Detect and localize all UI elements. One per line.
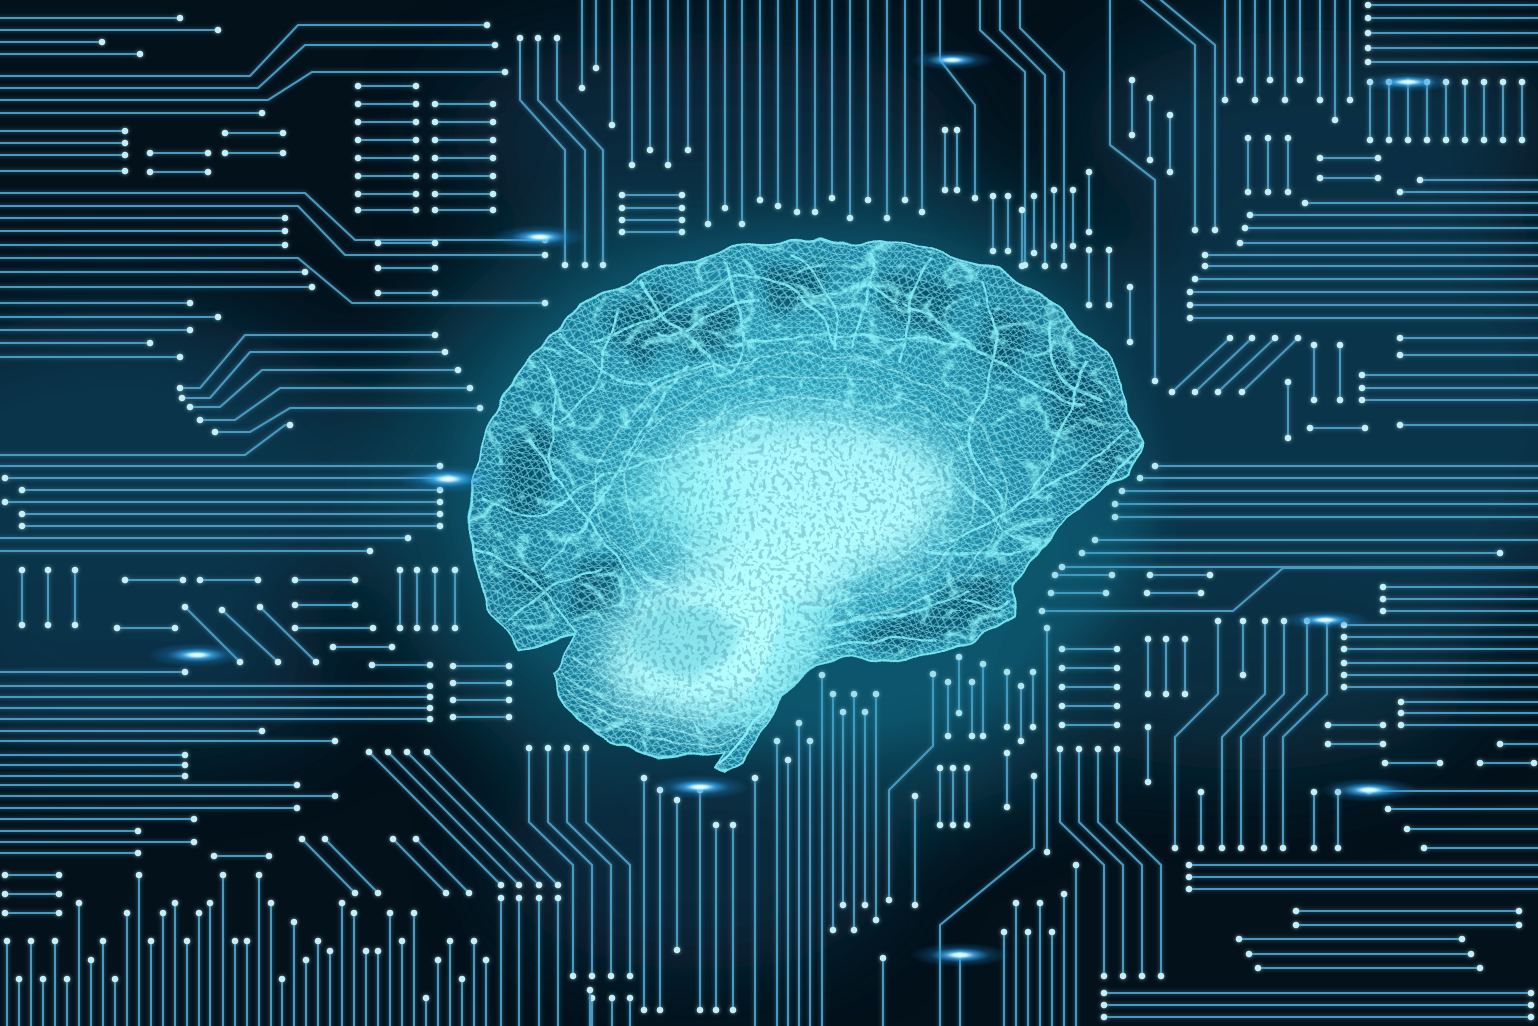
traces: lower right [1047, 587, 1538, 1017]
cerebellum dark centre [630, 604, 734, 676]
brain outline [471, 239, 1141, 776]
brain stem [720, 700, 770, 765]
brain body [460, 230, 1160, 790]
traces: bottom left verticals [7, 748, 630, 1026]
traces: bottom centre [590, 657, 1076, 1026]
dark cortex pockets [500, 262, 1125, 655]
traces: middle right [1042, 338, 1538, 611]
brain outer glow [460, 230, 1150, 750]
noise specks [460, 230, 1160, 790]
glowing light flares [147, 50, 1456, 967]
traces: top right [1110, 0, 1538, 381]
vein network [460, 230, 1160, 790]
limbic swirl rings [560, 355, 1005, 745]
brain shape with organic wobble [460, 230, 1160, 790]
bright core [610, 416, 955, 718]
traces: top centre [520, 0, 1130, 342]
traces: middle left [0, 193, 545, 551]
traces: lower left [0, 570, 558, 913]
wireframe mesh texture [460, 230, 1160, 790]
cortex folds [470, 250, 1140, 660]
brain [460, 230, 1160, 790]
cerebellum lobe [700, 600, 836, 725]
traces: top left [0, 18, 505, 210]
